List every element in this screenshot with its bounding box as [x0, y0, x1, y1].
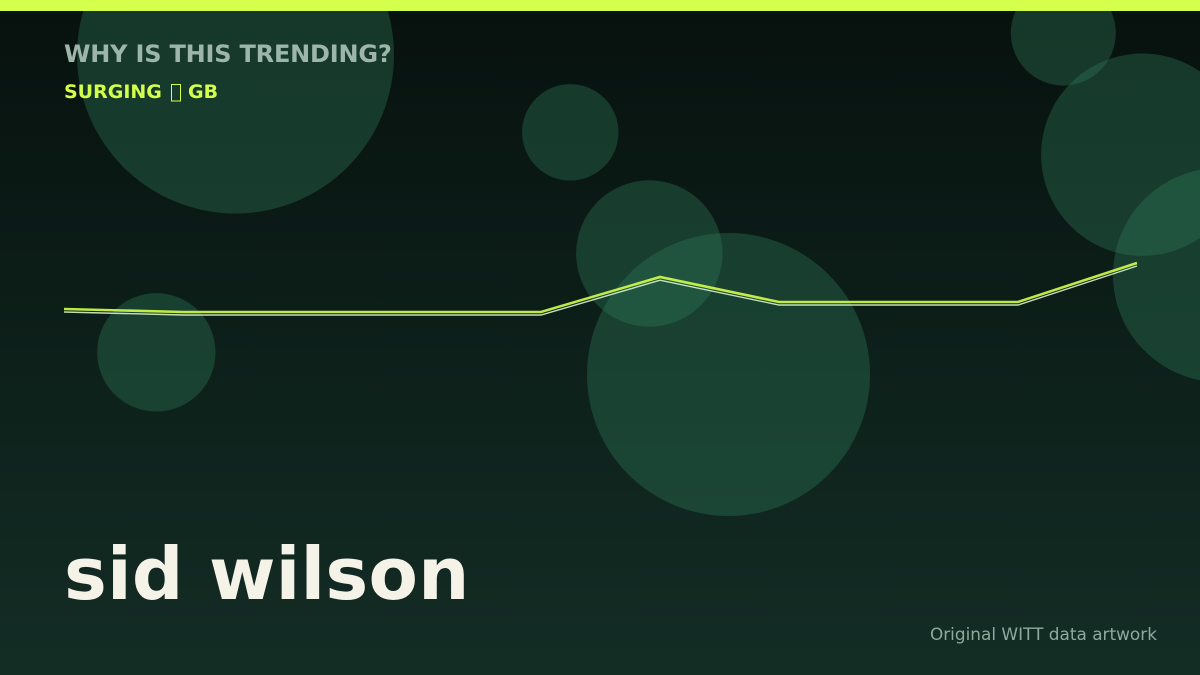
status label: GB — [188, 81, 218, 103]
status label — [64, 81, 218, 103]
decorative circles — [77, 0, 1200, 516]
main title: sid wilson — [64, 532, 470, 616]
trend line chart — [64, 263, 1137, 315]
eyebrow heading: WHY IS THIS TRENDING? — [64, 40, 392, 68]
icon: missing glyph box — [172, 84, 180, 101]
footer credit: Original WITT data artwork — [930, 624, 1157, 644]
status label: SURGING — [64, 81, 162, 103]
top accent bar — [0, 0, 1200, 11]
